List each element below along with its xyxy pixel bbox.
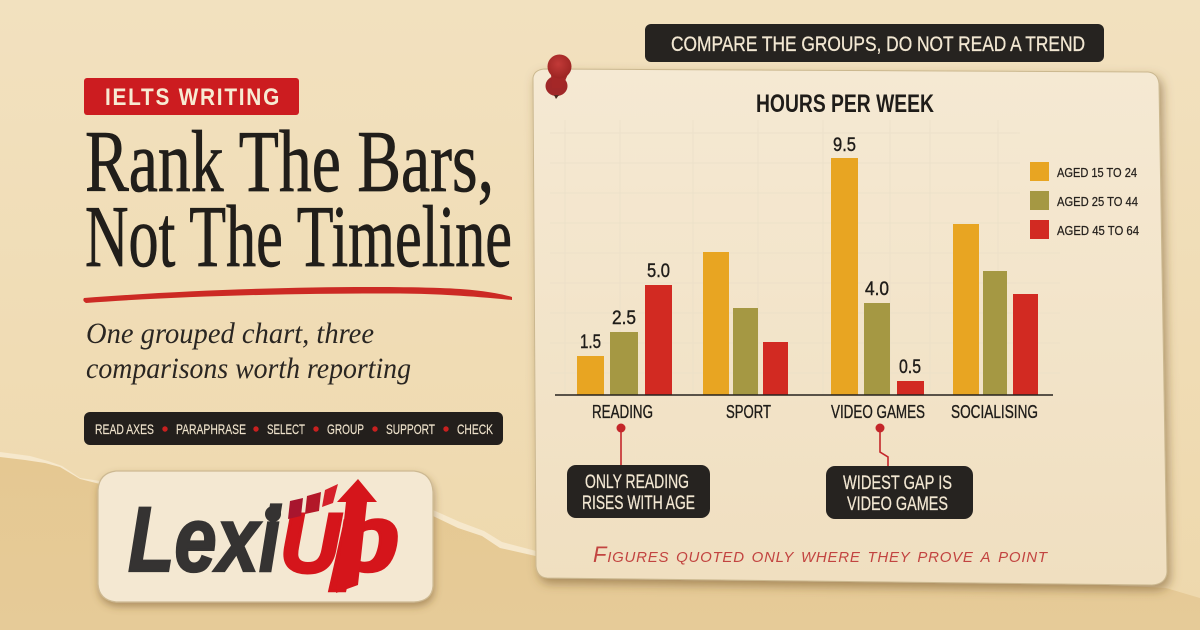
callout: only reading rises with age: ONLY READING [585, 472, 689, 493]
process strip: SELECT [267, 421, 305, 437]
handwritten note: Figures quoted only where they prove a point [593, 542, 1049, 567]
panel: chart card [533, 69, 1167, 585]
legend: AGED 15 TO 24 [1057, 165, 1137, 180]
chart heading: HOURS PER WEEK [756, 90, 934, 118]
title: Not The Timeline [85, 189, 512, 286]
process strip: CHECK [457, 421, 493, 437]
process strip: SUPPORT [386, 421, 435, 437]
legend [1030, 162, 1139, 239]
bar chart: 4.0 [865, 279, 889, 300]
bar chart: 9.5 [833, 135, 856, 156]
top banner: COMPARE THE GROUPS, DO NOT READ A TREND [671, 33, 1085, 56]
logo card: LexiUp: Lexi [128, 489, 282, 591]
bar chart: 2.5 [612, 308, 636, 329]
process strip [84, 412, 503, 445]
badge: IELTS writing [84, 78, 299, 115]
title: Rank The Bars, [85, 114, 494, 211]
top banner [645, 24, 1104, 62]
logo card: LexiUp: U [280, 496, 342, 590]
title [85, 114, 512, 286]
callout: widest gap is video games: VIDEO GAMES [847, 494, 948, 515]
bar chart: 5.0 [647, 261, 670, 282]
bar chart: 0.5 [899, 357, 921, 378]
logo card: LexiUp [98, 471, 433, 602]
red hand-drawn underline [83, 287, 512, 303]
logo card: LexiUp: p [329, 485, 400, 592]
bar chart: READING [592, 402, 653, 422]
subtitle [86, 317, 411, 385]
subtitle: comparisons worth reporting [86, 352, 411, 385]
callout: widest gap is video games [826, 424, 973, 519]
subtitle: One grouped chart, three [86, 317, 374, 350]
bar chart: VIDEO GAMES [831, 402, 925, 422]
badge: IELTS writing: IELTS WRITING [105, 84, 281, 111]
legend: AGED 45 TO 64 [1057, 223, 1139, 238]
callout: only reading rises with age [567, 424, 710, 518]
bar chart: 1.5 [580, 332, 601, 353]
process strip: PARAPHRASE [176, 421, 246, 437]
callout: only reading rises with age: RISES WITH AGE [582, 493, 695, 514]
torn kraft paper lower layer [0, 452, 1200, 630]
legend: AGED 25 TO 44 [1057, 194, 1138, 209]
bar chart: SOCIALISING [951, 402, 1038, 422]
icon: red push pin [546, 54, 572, 99]
bar chart: SPORT [726, 402, 771, 422]
process strip: READ AXES [95, 421, 154, 437]
bar chart [555, 135, 1053, 422]
process strip: GROUP [327, 421, 364, 437]
callout: widest gap is video games: WIDEST GAP IS [843, 473, 952, 494]
